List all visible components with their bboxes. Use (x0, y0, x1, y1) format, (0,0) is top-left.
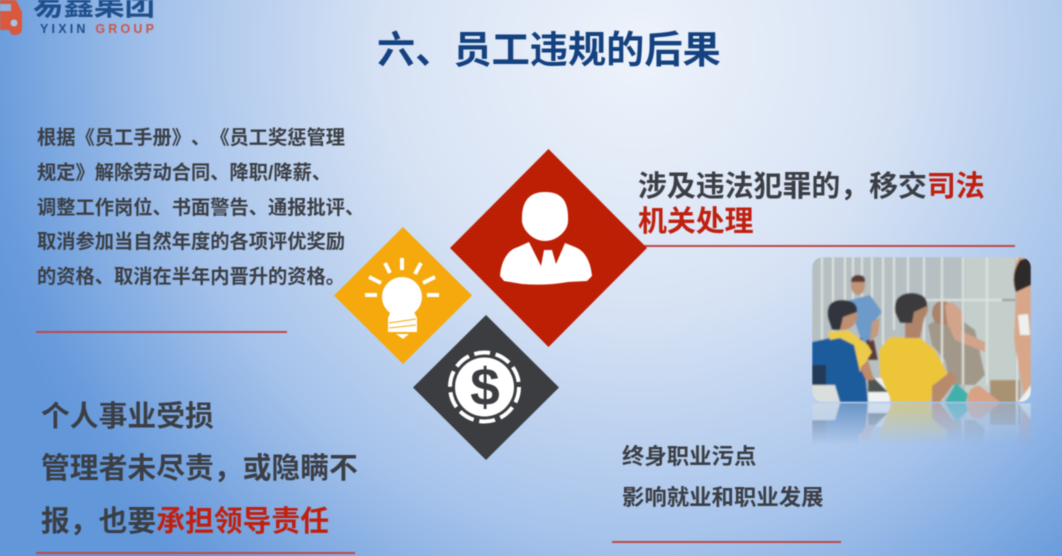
icon: yellow diamond with light bulb (334, 227, 472, 364)
icon: dark diamond with dollar coin: $ (470, 358, 500, 417)
logo subtitle: YIXIN GROUP (40, 22, 157, 36)
text block: career damage: 个人事业受损 (41, 400, 214, 432)
text block: career damage: 管理者未尽责，或隐瞒不 (41, 453, 358, 485)
photo reflection (812, 402, 1032, 442)
text block: disciplinary consequences: 的资格、取消在半年内晋升的资格。 (37, 267, 345, 288)
text block: career damage: 报，也要承担领导责任 (41, 506, 329, 538)
text block: disciplinary consequences: 调整工作岗位、书面警告、通报批评、 (37, 198, 364, 219)
icon: dark diamond with dollar coin (413, 315, 559, 460)
photo: prison visit (812, 257, 1031, 402)
icon: red diamond with businessman (450, 149, 647, 347)
text block: disciplinary consequences: 规定》解除劳动合同、降职/降薪、 (37, 163, 331, 184)
logo (0, 0, 157, 36)
text block: legal referral: 涉及违法犯罪的，移交司法 (638, 170, 985, 202)
text block: legal referral (638, 170, 985, 238)
title: 六、员工违规的后果 (377, 29, 721, 72)
text block: career stain: 终身职业污点 (622, 444, 756, 469)
text block: career damage (41, 400, 358, 538)
text block: disciplinary consequences (37, 126, 364, 288)
text block: career stain (622, 444, 824, 510)
text block: disciplinary consequences: 取消参加当自然年度的各项评优奖励 (37, 232, 345, 253)
text block: disciplinary consequences: 根据《员工手册》、《员工奖惩管理 (37, 128, 345, 149)
icon: car (0, 0, 23, 36)
text block: legal referral: 机关处理 (638, 206, 754, 238)
text block: career stain: 影响就业和职业发展 (622, 484, 824, 510)
